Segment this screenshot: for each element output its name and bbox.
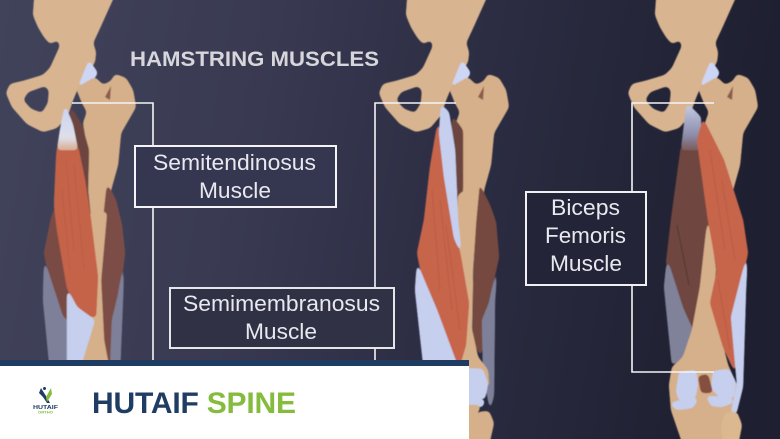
label: biceps femoris muscle: Muscle (550, 251, 622, 276)
label: biceps femoris muscle (526, 192, 646, 285)
label: semitendinosus muscle: Muscle (199, 178, 271, 203)
footer banner (0, 360, 469, 439)
label: semimembranosus muscle (170, 288, 394, 348)
label: semitendinosus muscle (135, 146, 336, 207)
label: biceps femoris muscle: Biceps (551, 195, 620, 220)
leader line: semitendinosus (72, 103, 153, 360)
brand name: HUTAIF SPINE (92, 387, 296, 420)
icon: hutaif logo (33, 387, 59, 414)
label: semitendinosus muscle: Semitendinosus (153, 150, 316, 175)
anatomy: biceps femoris leg (628, 0, 758, 439)
label: semimembranosus muscle: Muscle (245, 319, 317, 344)
anatomy: semitendinosus leg (6, 0, 136, 372)
icon: hutaif logo: HUTAIF (33, 405, 59, 411)
title: HAMSTRING MUSCLES (130, 48, 379, 71)
label: biceps femoris muscle: Femoris (545, 223, 626, 248)
leader line: biceps femoris (632, 103, 714, 372)
leader line: semimembranosus (375, 103, 456, 360)
label: semimembranosus muscle: Semimembranosus (183, 291, 380, 316)
anatomy: semimembranosus leg (379, 0, 509, 439)
icon: hutaif logo: ORTHO (38, 410, 53, 414)
